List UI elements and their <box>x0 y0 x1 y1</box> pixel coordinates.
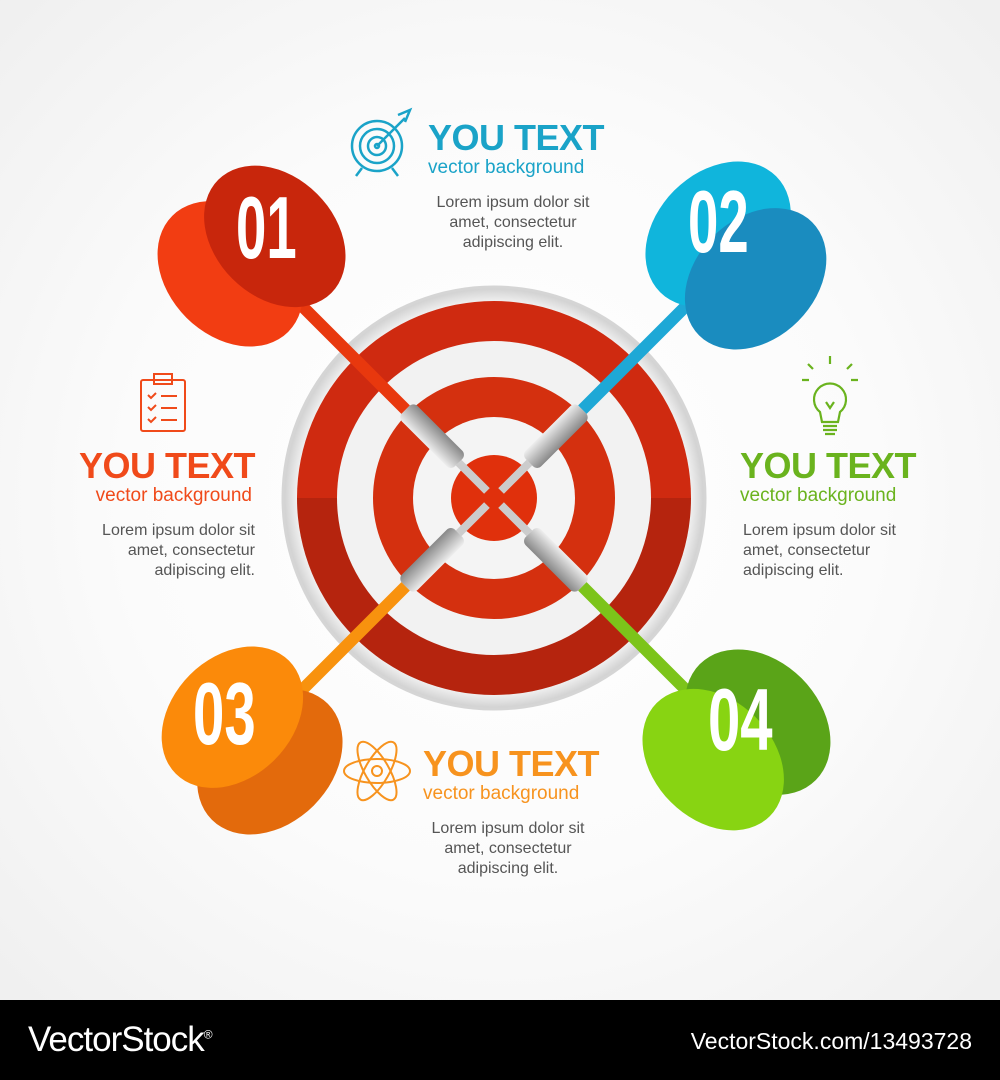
dart numbers: 04 <box>708 671 773 769</box>
dart 03 orange <box>128 441 551 864</box>
text block: right: YOU TEXT <box>740 445 916 486</box>
icon: target <box>352 110 410 176</box>
text block: bottom: amet, consectetur <box>444 840 572 857</box>
text block: right: vector background <box>740 485 896 506</box>
text block: bottom <box>423 743 600 877</box>
text block: right: Lorem ipsum dolor sit <box>743 522 896 539</box>
dart numbers: 03 <box>193 664 256 763</box>
text block: bottom: Lorem ipsum dolor sit <box>432 820 584 837</box>
footer: VectorStock.com/13493728 <box>691 1028 972 1054</box>
dart numbers <box>193 173 773 769</box>
text block: top: amet, consectetur <box>449 214 577 231</box>
icon: bulb <box>802 356 858 434</box>
text block: left: vector background <box>96 485 252 506</box>
text block: left: YOU TEXT <box>79 445 255 486</box>
text block: right: amet, consectetur <box>743 542 870 559</box>
icon: atom <box>344 736 410 806</box>
text block: bottom: adipiscing elit. <box>458 860 558 877</box>
text block: left: Lorem ipsum dolor sit <box>102 522 255 539</box>
text block: bottom: YOU TEXT <box>423 743 599 784</box>
dart numbers: 02 <box>688 173 749 271</box>
target <box>283 287 705 709</box>
footer <box>0 1000 1000 1080</box>
text block: left: adipiscing elit. <box>154 562 255 579</box>
text block: top: Lorem ipsum dolor sit <box>437 194 589 211</box>
text block: right: adipiscing elit. <box>743 562 844 579</box>
text block: bottom: vector background <box>423 783 579 804</box>
text block: top: YOU TEXT <box>428 117 604 158</box>
dart numbers: 01 <box>236 179 297 277</box>
footer: VectorStock® <box>28 1020 212 1059</box>
text block: top: vector background <box>428 157 584 178</box>
dart 01 red <box>128 132 551 555</box>
text block: left: amet, consectetur <box>128 542 255 559</box>
text block: left <box>79 445 256 579</box>
icon: clipboard <box>141 374 185 431</box>
text block: top: adipiscing elit. <box>463 234 563 251</box>
text block: right <box>740 445 916 579</box>
text block: top <box>428 117 604 251</box>
dart 02 blue <box>437 132 860 555</box>
dart 04 green <box>437 441 860 864</box>
